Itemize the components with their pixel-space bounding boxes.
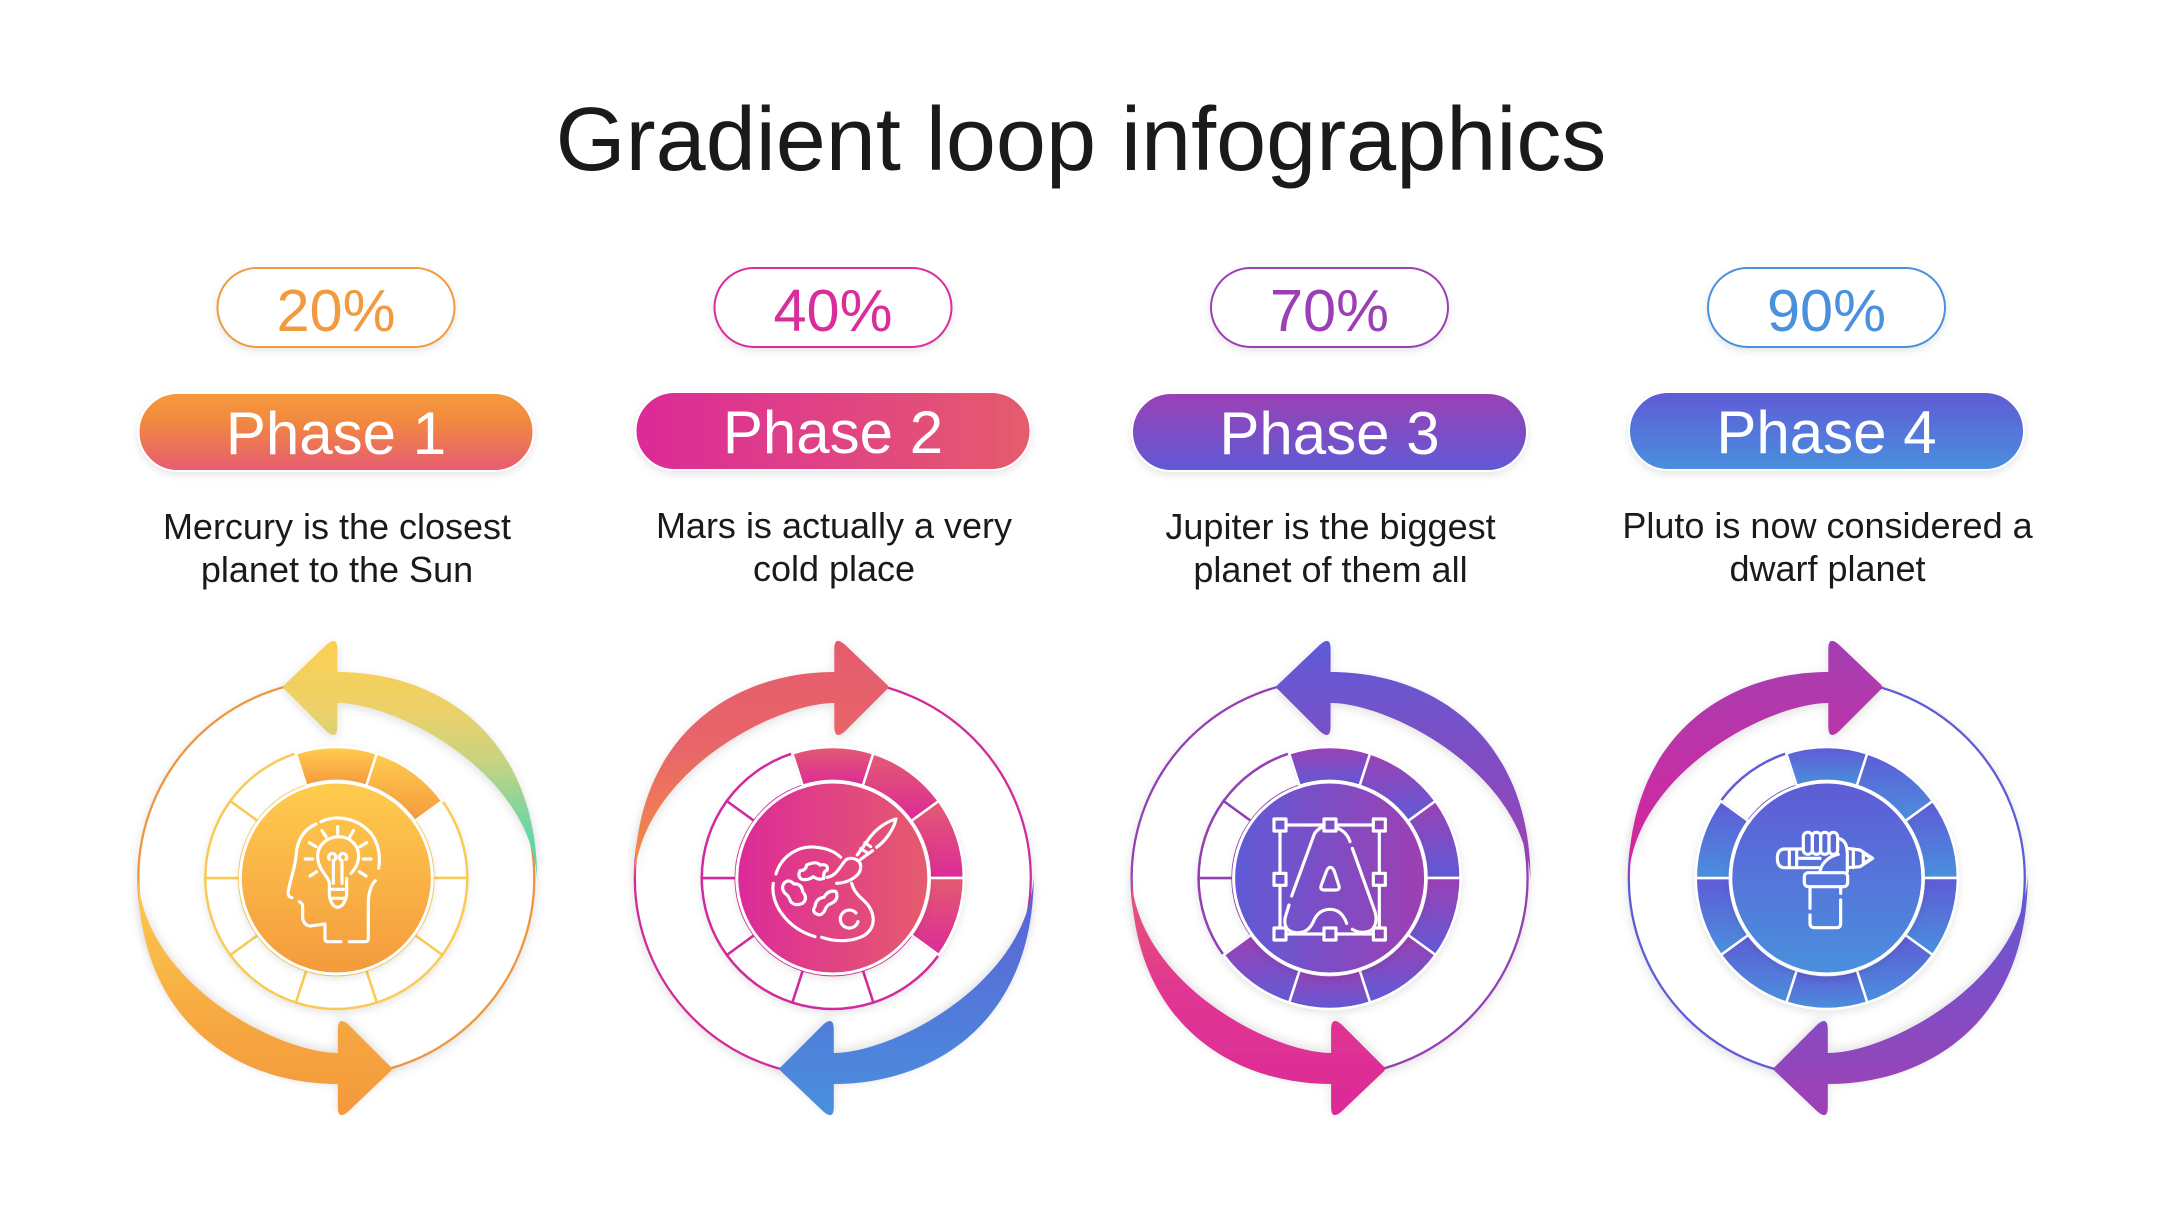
column: phase 4 [1622, 268, 2034, 1115]
arrow top [1277, 641, 1531, 881]
centre disc [737, 782, 929, 974]
phase pill 4: Phase 4 [1716, 399, 1937, 466]
loop ring [1629, 680, 2025, 1076]
loop ring [635, 680, 1031, 1076]
progress ring 20% [205, 747, 467, 1009]
description 1: planet to the Sun [201, 549, 473, 590]
icon: vector letter A [1274, 819, 1385, 940]
phase pill 2: Phase 2 [723, 399, 943, 466]
icon: palette and brush [773, 819, 896, 941]
arrow bottom [1131, 875, 1385, 1115]
arrow bottom [138, 875, 392, 1115]
percent pill 40%: 40% [773, 277, 893, 344]
loop ring [138, 680, 534, 1076]
description 1: Mercury is the closest [163, 506, 511, 547]
progress ring 70% [1199, 747, 1461, 1009]
phase pill 3: Phase 3 [1219, 400, 1440, 467]
column: phase 3 [1131, 268, 1531, 1115]
arrow top [634, 641, 888, 881]
description 2: cold place [753, 548, 915, 589]
arrow top [283, 641, 537, 881]
phase pill 2 [636, 392, 1030, 470]
icon: head with light bulb [288, 818, 379, 942]
phase pill 1: Phase 1 [226, 400, 446, 467]
description 4: Pluto is now considered a [1622, 505, 2034, 546]
arrow bottom [780, 875, 1034, 1115]
arrow top [1628, 641, 1882, 881]
icon: hand holding pencil [1777, 832, 1873, 928]
title: Gradient loop infographics [556, 90, 1606, 190]
column: phase 2 [634, 268, 1034, 1115]
percent pill 70%: 70% [1270, 277, 1389, 344]
progress ring 90% [1696, 747, 1958, 1009]
percent pill 40% [714, 268, 952, 347]
centre disc [1234, 782, 1426, 974]
description 3: planet of them all [1193, 549, 1468, 590]
progress ring 40% [702, 747, 964, 1009]
loop diagram 3 [1131, 641, 1531, 1115]
loop diagram 2 [634, 641, 1034, 1115]
loop diagram 1 [138, 641, 537, 1115]
percent pill 20%: 20% [276, 277, 396, 344]
percent pill 20% [218, 268, 454, 347]
phase pill 4 [1629, 392, 2024, 470]
column: phase 1 [138, 268, 537, 1115]
loop diagram 4 [1628, 641, 2028, 1115]
centre disc [240, 782, 432, 974]
loop ring [1132, 680, 1528, 1076]
centre disc [1731, 782, 1923, 974]
description 4: dwarf planet [1729, 548, 1926, 589]
description 2: Mars is actually a very [656, 505, 1012, 546]
percent pill 90%: 90% [1767, 277, 1886, 344]
percent pill 70% [1211, 268, 1448, 347]
phase pill 1 [138, 393, 534, 471]
percent pill 90% [1708, 268, 1945, 347]
description 3: Jupiter is the biggest [1165, 506, 1496, 547]
phase pill 3 [1132, 393, 1527, 471]
arrow bottom [1774, 875, 2028, 1115]
